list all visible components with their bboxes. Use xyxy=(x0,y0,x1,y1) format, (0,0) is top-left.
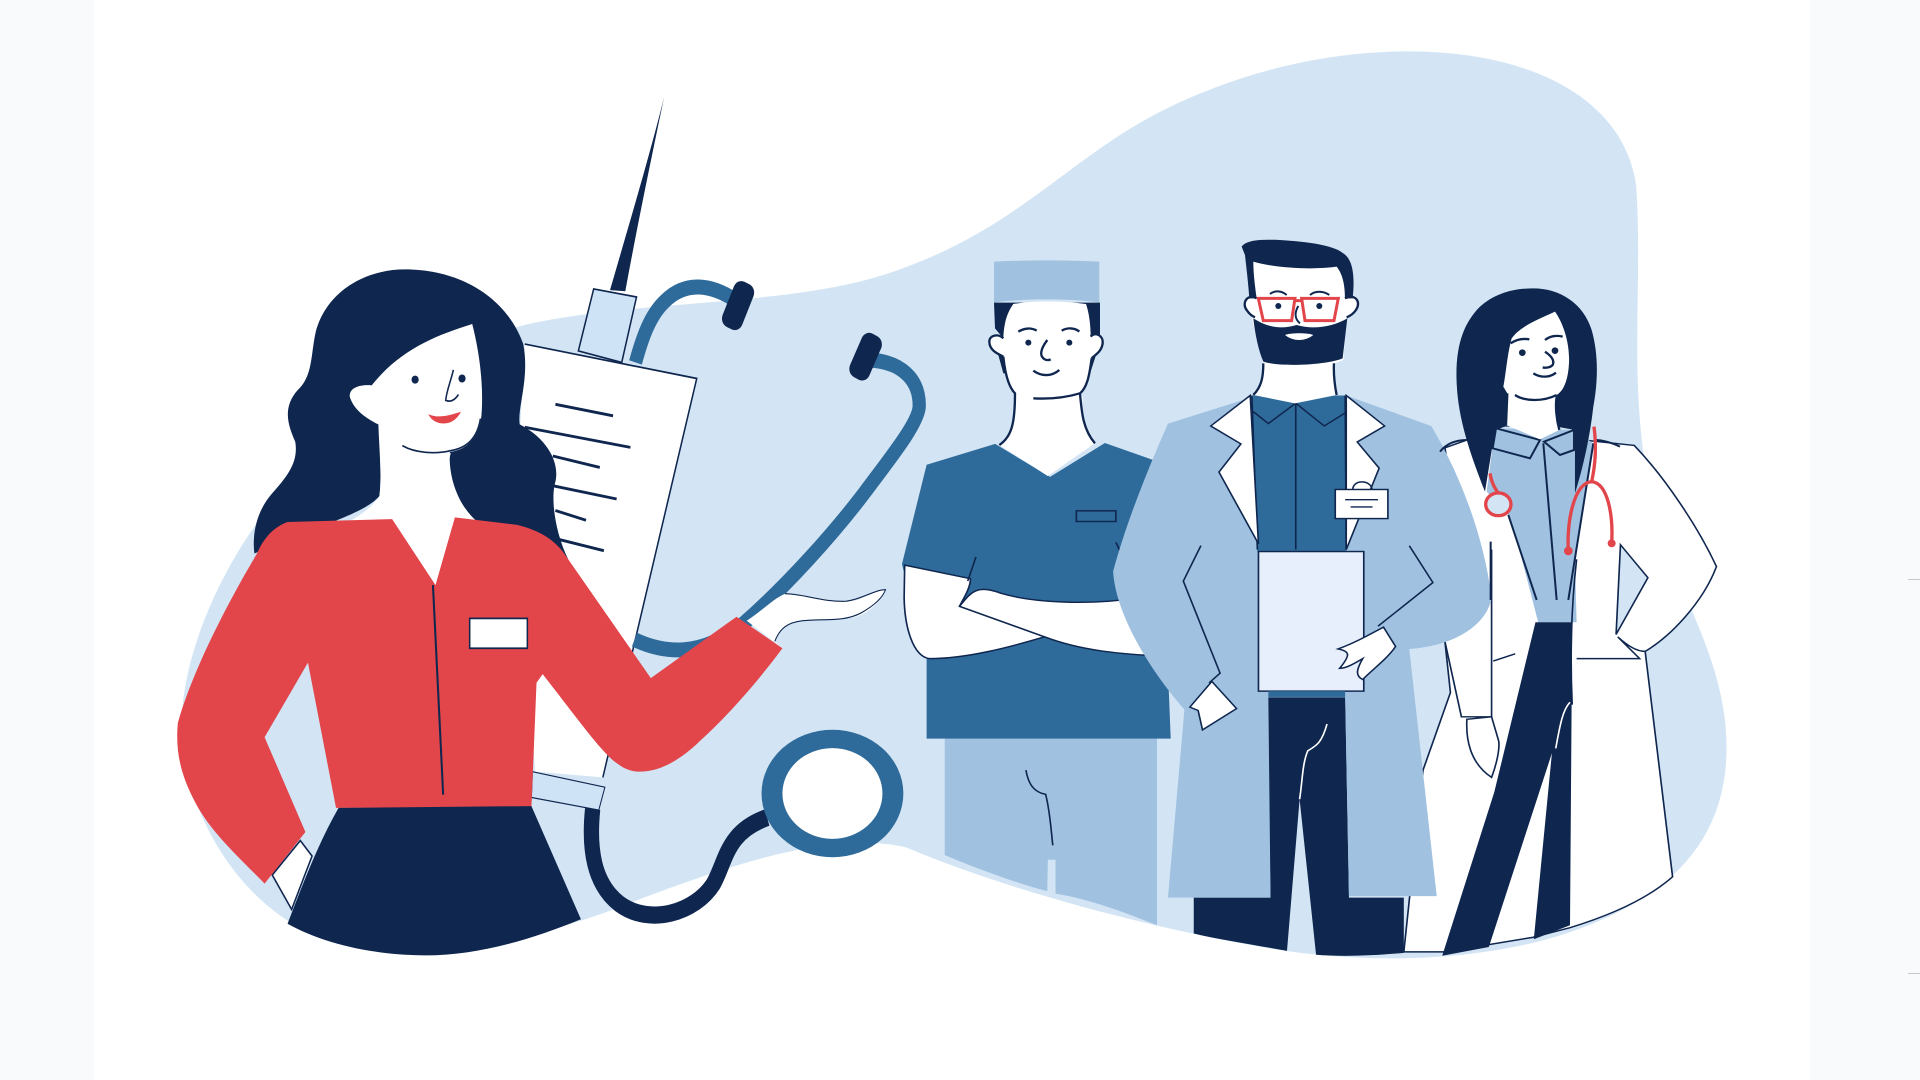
left hand xyxy=(272,841,312,909)
syringe xyxy=(517,97,697,810)
long hair xyxy=(1456,288,1597,493)
lapels xyxy=(1211,395,1258,544)
surgeon trousers xyxy=(945,739,1157,925)
blue coat xyxy=(1113,395,1492,898)
woman doctor body xyxy=(1404,429,1716,956)
blouse xyxy=(177,517,782,884)
hair xyxy=(254,269,568,559)
sleeve lines xyxy=(1183,546,1433,683)
inner arm opening xyxy=(1616,545,1648,634)
pocket xyxy=(1076,511,1116,521)
doctor head xyxy=(1242,240,1358,403)
face xyxy=(1503,312,1569,439)
heads: surgeon and bearded doctor xyxy=(989,240,1358,476)
trousers xyxy=(1442,622,1572,956)
open hand xyxy=(747,590,886,648)
surgeon body xyxy=(902,443,1171,925)
scrub top xyxy=(902,443,1171,739)
background blob xyxy=(181,51,1727,958)
red stethoscope xyxy=(1486,427,1614,554)
coat hand xyxy=(1467,717,1499,777)
presenter woman xyxy=(177,269,886,955)
face and neck xyxy=(350,324,482,585)
skirt xyxy=(288,806,581,955)
doctor hair xyxy=(1242,240,1354,298)
clipboard xyxy=(1258,552,1364,691)
surgeon head xyxy=(989,301,1103,476)
bearded doctor body xyxy=(1113,395,1492,956)
head: woman doctor with stethoscope xyxy=(1440,288,1620,600)
coat sleeve line xyxy=(1445,550,1645,717)
blouse and collar xyxy=(1440,428,1620,600)
beard xyxy=(1253,318,1347,365)
stethoscope xyxy=(591,278,919,915)
lab coat xyxy=(1404,439,1716,952)
name badge xyxy=(470,618,527,648)
left group: syringe, stethoscope, presenter xyxy=(177,97,919,955)
right group: staff bodies xyxy=(902,395,1716,956)
dark shirt xyxy=(1252,395,1346,552)
doctor trousers xyxy=(1194,690,1404,956)
glasses xyxy=(1258,298,1338,321)
surgical cap xyxy=(994,260,1099,303)
ID badge xyxy=(1335,482,1388,519)
blue blouse xyxy=(1497,429,1577,622)
crossed arms xyxy=(904,565,1045,659)
blouse zipper xyxy=(433,585,443,795)
doctor hands xyxy=(1338,627,1396,679)
